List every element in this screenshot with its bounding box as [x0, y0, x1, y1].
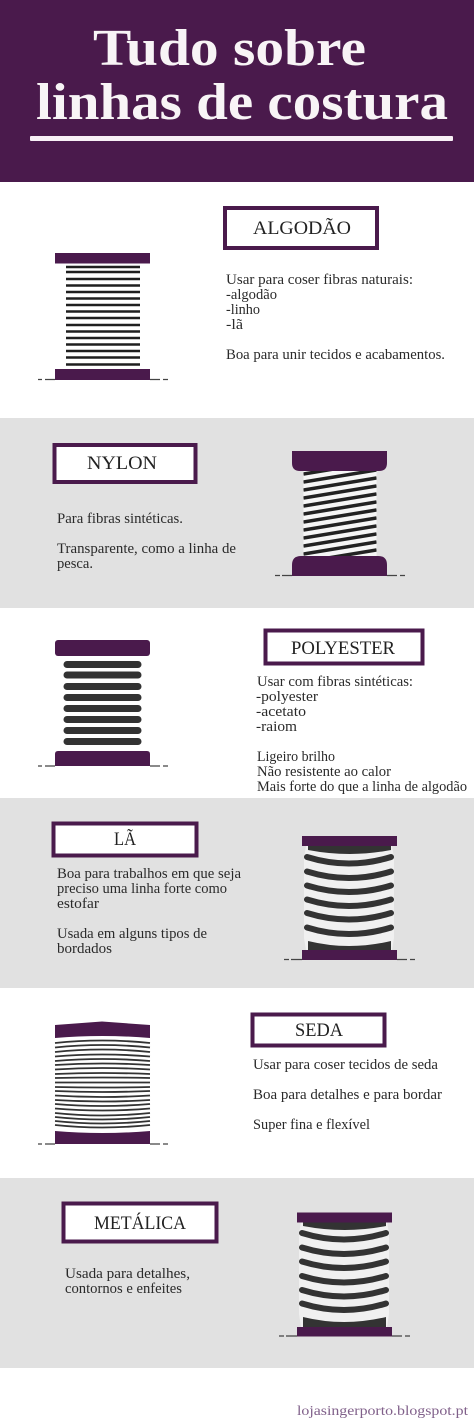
heading: nylon	[54, 445, 196, 482]
heading: algodão	[225, 208, 377, 248]
footer source link text: lojasingerporto.blogspot.pt	[297, 1404, 468, 1419]
text: seda description	[253, 1057, 442, 1133]
title: linhas de costura	[36, 74, 448, 131]
heading: metálica: METÁLICA	[94, 1212, 186, 1234]
heading: seda	[252, 1014, 384, 1046]
heading: lã	[54, 824, 196, 856]
text: lã description	[57, 866, 242, 957]
text: polyester description: -raiom	[256, 719, 298, 735]
panel: metálica	[0, 1178, 474, 1368]
text: seda description: Usar para coser tecidos de seda	[253, 1057, 439, 1073]
heading: nylon: NYLON	[87, 453, 157, 474]
text: polyester description: Usar com fibras sintéticas:	[257, 674, 413, 690]
text: seda description: Super fina e flexível	[253, 1117, 370, 1133]
panel: seda	[38, 1014, 442, 1144]
text: nylon description: pesca.	[57, 556, 93, 572]
heading: lã: LÃ	[114, 828, 136, 850]
heading: polyester: POLYESTER	[291, 638, 395, 659]
text: algodão description: Boa para unir tecidos e acabamentos.	[226, 347, 445, 363]
icon: polyester thread spool	[38, 640, 168, 766]
panel: polyester	[38, 630, 467, 795]
panel: nylon	[0, 418, 474, 608]
heading: algodão: ALGODÃO	[253, 217, 351, 239]
text: polyester description: -acetato	[256, 704, 306, 720]
text: nylon description	[57, 511, 236, 572]
panel: algodão	[38, 208, 445, 380]
text: algodão description	[226, 272, 445, 363]
title	[36, 20, 448, 131]
text: seda description: Boa para detalhes e para bordar	[253, 1087, 442, 1103]
title: Tudo sobre	[93, 20, 366, 77]
text: nylon description: Para fibras sintéticas.	[57, 511, 183, 527]
text: polyester description: Mais forte do que a linha de algodão	[257, 779, 467, 795]
text: metálica description: contornos e enfeites	[65, 1281, 182, 1297]
icon: cotton thread spool	[38, 253, 168, 380]
header banner	[0, 0, 474, 182]
heading: seda: SEDA	[295, 1020, 343, 1041]
text: polyester description: -polyester	[256, 689, 318, 705]
text: polyester description	[256, 674, 467, 795]
text: algodão description: -algodão	[226, 287, 277, 303]
text: algodão description: -linho	[226, 302, 260, 318]
text: metálica description: Usada para detalhes,	[65, 1266, 190, 1282]
heading: polyester	[266, 630, 422, 664]
icon: nylon thread spool	[275, 451, 405, 576]
text: polyester description: Ligeiro brilho	[257, 749, 335, 765]
icon: metallic thread spool	[279, 1212, 410, 1336]
heading: metálica	[64, 1204, 216, 1242]
icon: silk thread spool	[38, 1022, 168, 1144]
text: lã description: bordados	[57, 941, 112, 957]
text: lã description: preciso uma linha forte como	[57, 881, 227, 897]
icon: wool thread spool	[284, 836, 415, 960]
text: lã description: estofar	[57, 896, 99, 912]
text: nylon description: Transparente, como a linha de	[57, 541, 236, 557]
text: polyester description: Não resistente ao calor	[257, 764, 391, 780]
panel: lã	[0, 798, 474, 988]
text: algodão description: Usar para coser fibras naturais:	[226, 272, 413, 288]
text: metálica description	[65, 1266, 190, 1297]
text: lã description: Usada em alguns tipos de	[57, 926, 207, 942]
text: lã description: Boa para trabalhos em que seja	[57, 866, 242, 882]
text: algodão description: -lã	[226, 317, 244, 333]
